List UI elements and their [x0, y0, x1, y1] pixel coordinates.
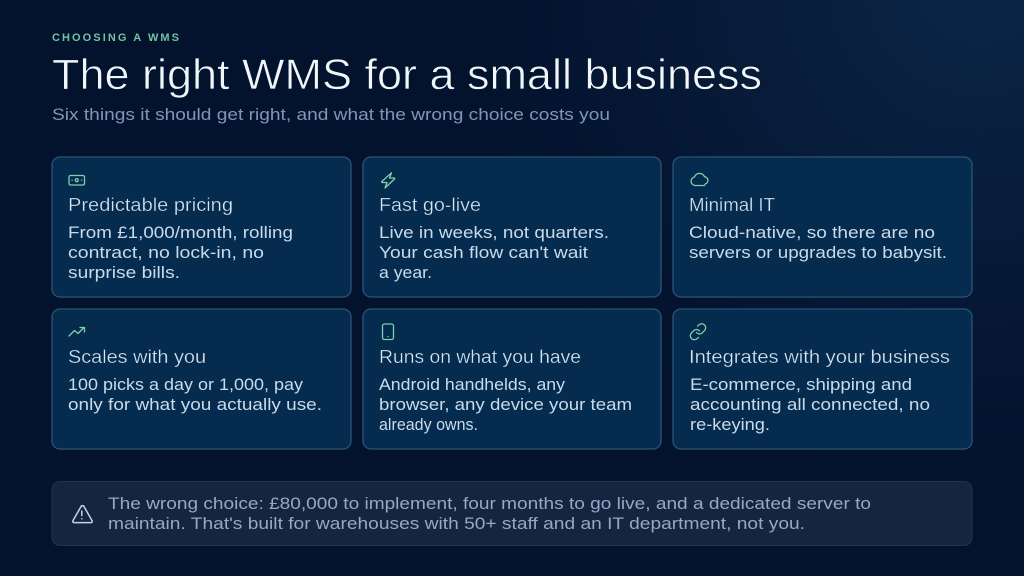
- card body: contract, no lock-in, no: [68, 244, 264, 262]
- panel: minimal IT: [673, 157, 972, 297]
- card body: E-commerce, shipping and: [690, 376, 912, 394]
- icon: cloud: [691, 173, 708, 186]
- card body: 100 picks a day or 1,000, pay: [68, 376, 304, 394]
- card body: servers or upgrades to babysit.: [689, 244, 947, 262]
- card body: Cloud-native, so there are no: [689, 224, 935, 242]
- card body: [690, 376, 930, 434]
- card body: only for what you actually use.: [68, 396, 322, 414]
- card body: [689, 224, 947, 262]
- icon: banknote: [69, 176, 84, 185]
- icon: phone: [382, 324, 394, 340]
- panel: runs on what you have: [363, 309, 661, 449]
- icon: lightning bolt: [382, 173, 395, 188]
- icon: warning triangle: [73, 506, 92, 523]
- card body: re-keying.: [690, 416, 770, 434]
- card body: already owns.: [379, 416, 478, 434]
- card body: browser, any device your team: [379, 396, 632, 414]
- callout text: The wrong choice: £80,000 to implement, four months to go live, and a dedicated server to: [108, 495, 871, 513]
- card body: accounting all connected, no: [690, 396, 930, 414]
- callout text: maintain. That's built for warehouses with 50+ staff and an IT department, not you.: [108, 515, 805, 533]
- card body: Live in weeks, not quarters.: [379, 224, 609, 242]
- card body: [68, 376, 322, 414]
- callout text: [108, 495, 871, 533]
- icon: trend arrow: [69, 328, 84, 336]
- card body: Your cash flow can't wait: [379, 244, 588, 262]
- panel: predictable pricing: [52, 157, 351, 297]
- panel: integrates with your business: [673, 309, 972, 449]
- eyebrow label: CHOOSING A WMS: [52, 32, 179, 44]
- card body: surprise bills.: [68, 264, 180, 282]
- title: The right WMS for a small business: [52, 51, 762, 99]
- card body: [379, 376, 632, 434]
- subtitle: Six things it should get right, and what the wrong choice costs you: [52, 105, 610, 124]
- card body: Android handhelds, any: [379, 376, 566, 394]
- icon: link: [690, 324, 706, 340]
- card heading: Minimal IT: [689, 194, 775, 215]
- card heading: Scales with you: [68, 346, 206, 367]
- panel: fast go-live: [363, 157, 661, 297]
- card heading: Predictable pricing: [68, 194, 233, 215]
- callout: the wrong choice: [52, 482, 972, 546]
- card body: [379, 224, 609, 282]
- card heading: Runs on what you have: [379, 346, 581, 367]
- panel: scales with you: [52, 309, 351, 449]
- card body: a year.: [379, 264, 432, 282]
- card heading: Integrates with your business: [689, 346, 950, 367]
- card body: [68, 224, 293, 282]
- card body: From £1,000/month, rolling: [68, 224, 293, 242]
- card heading: Fast go-live: [379, 194, 481, 215]
